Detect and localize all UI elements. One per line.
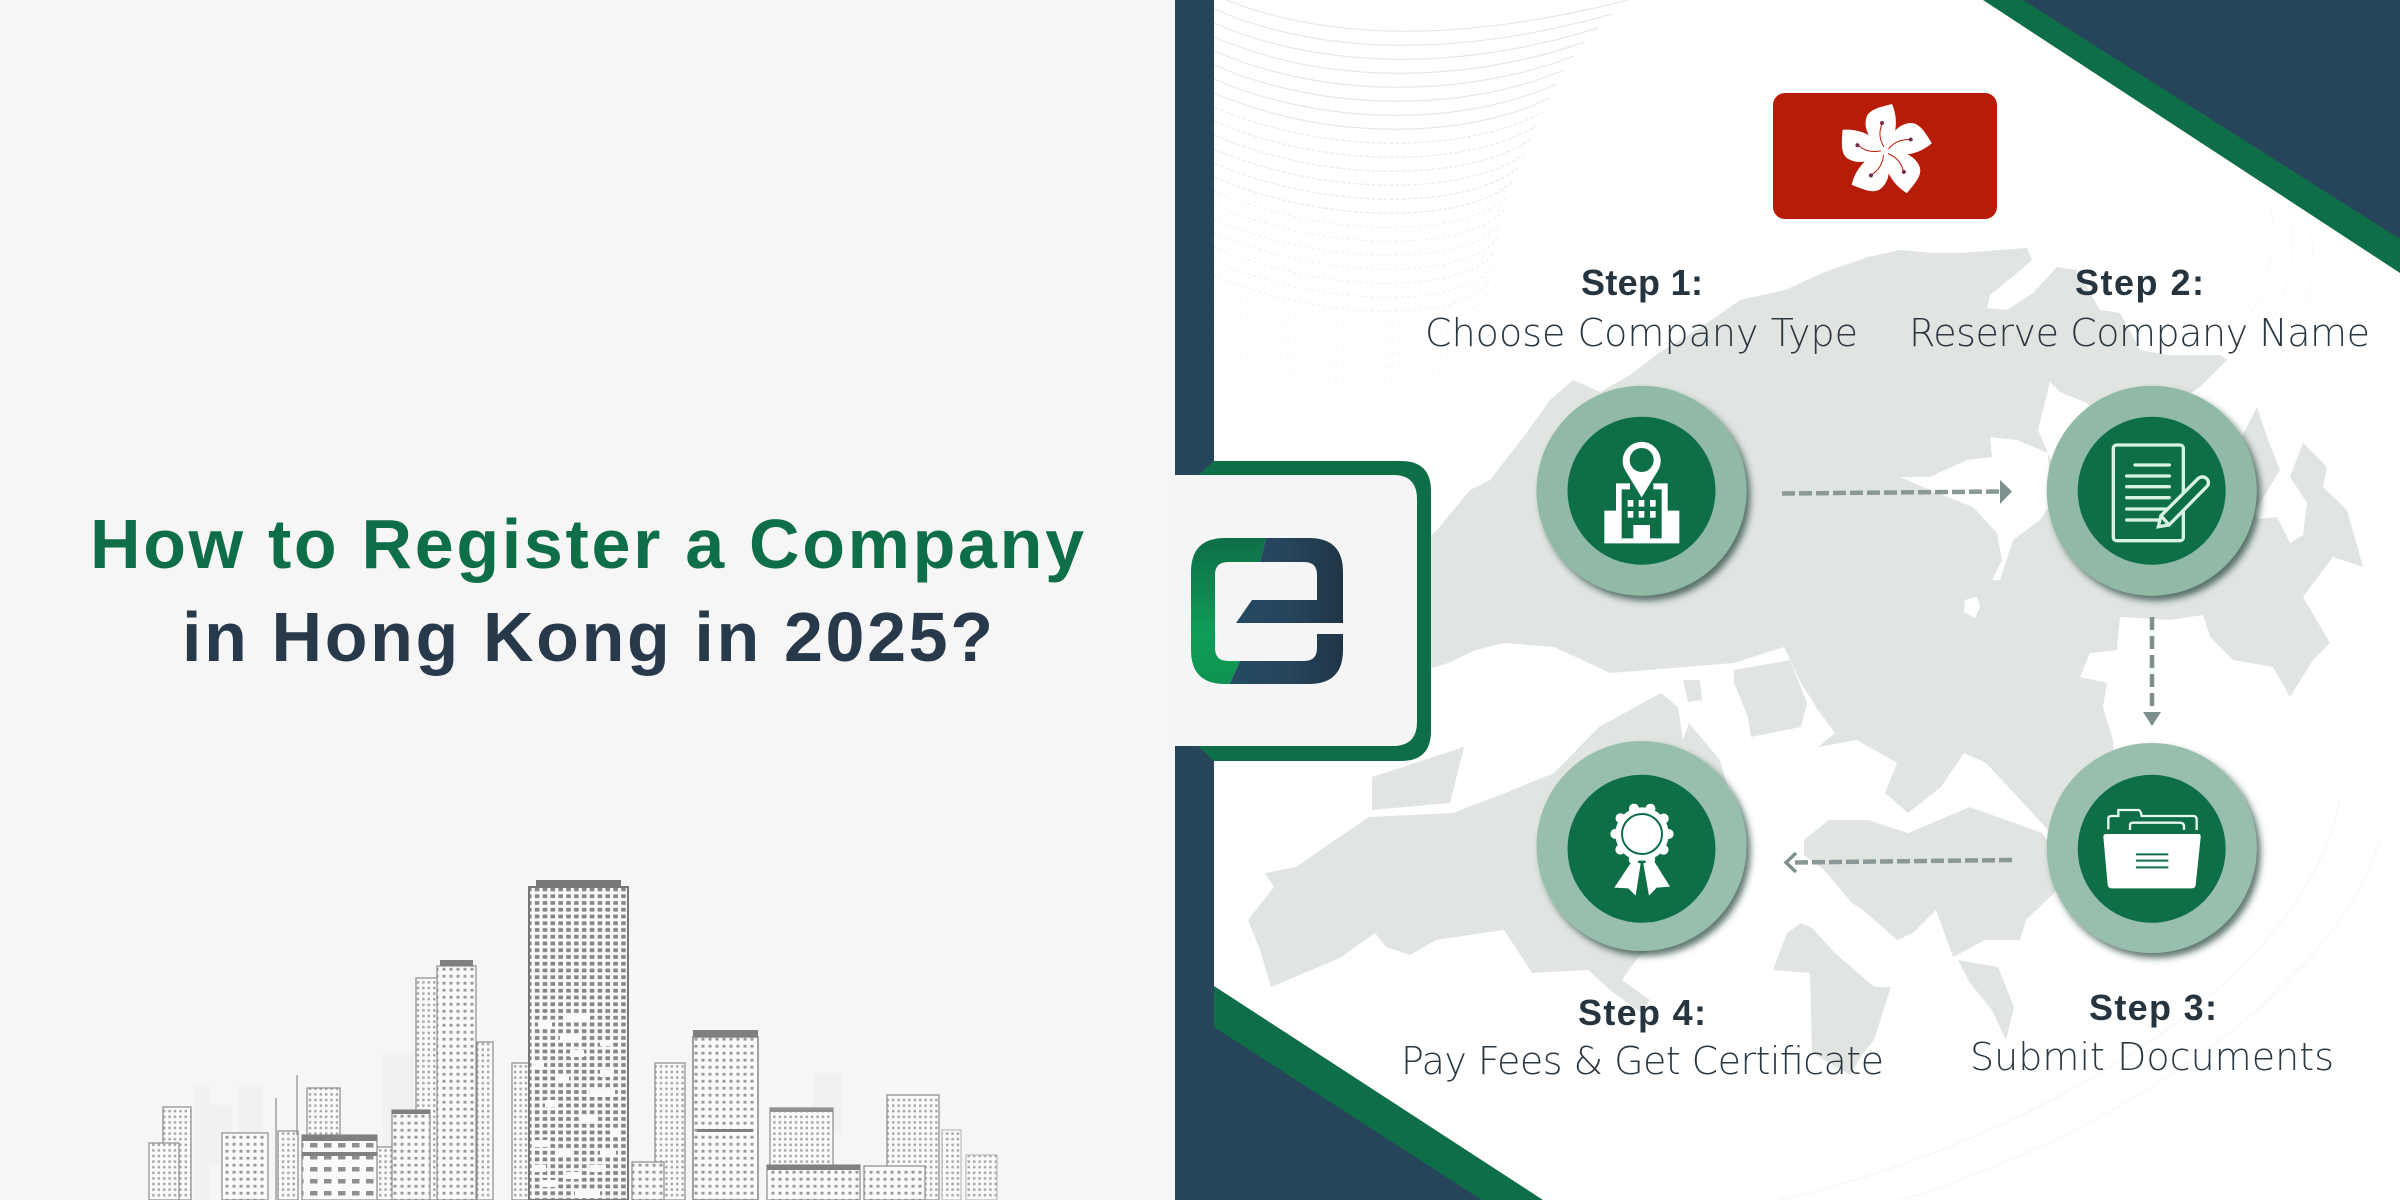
panel: left background (0, 0, 1175, 1200)
step 3 label: Submit Documents (1970, 1035, 2334, 1079)
arrow: step 2 to step 3 (2143, 617, 2161, 726)
skyline: main tower (529, 887, 628, 1200)
map: Chek Lap Kok airport island (1372, 747, 1464, 810)
map: small southern island (1958, 960, 2014, 1040)
step 4 label (1401, 992, 1884, 1083)
corner: bottom-left green and navy triangles (1214, 986, 1543, 1200)
step 1 label (1425, 262, 1858, 355)
panel: right background (1175, 0, 2400, 1200)
flag: bauhinia flower (1834, 104, 1933, 200)
map of Hong Kong silhouette (1248, 248, 2363, 1075)
map: small islet (1683, 680, 1702, 702)
step 2 label: Reserve Company Name (1909, 311, 2370, 355)
step 4 label: Pay Fees & Get Certificate (1401, 1039, 1884, 1083)
icon: document and pencil (2113, 445, 2208, 541)
logo mark: letter e (1191, 538, 1343, 684)
map: New Territories and Kowloon (1420, 248, 2290, 850)
step 1 label: Choose Company Type (1425, 311, 1858, 355)
title: How to Register a Company (90, 505, 1084, 583)
step 3 label (1970, 987, 2334, 1079)
flag of Hong Kong (1773, 93, 1997, 219)
arrow: step 3 to step 4 (1786, 853, 2012, 872)
step 2 circle (2047, 386, 2257, 596)
skyline illustration (149, 880, 997, 1200)
step 2 label (1909, 262, 2370, 355)
map: Sai Kung peninsula (2180, 407, 2363, 697)
skyline: tower missing windows (534, 1015, 620, 1198)
navy vertical strip (1175, 0, 1214, 1200)
map: Tsing Yi island (1734, 660, 1807, 737)
step 1 label: Step 1: (1581, 262, 1703, 303)
step 4 label: Step 4: (1578, 992, 1706, 1033)
map: white inlets (1900, 382, 2100, 618)
step 4 circle (1536, 741, 1746, 951)
map: Hong Kong Island (1804, 807, 2070, 957)
icon: file folder (2103, 810, 2201, 888)
title (90, 505, 1084, 676)
wave pattern: faint dots top-right and rings bottom-right (1780, 120, 2380, 1200)
logo card (1175, 461, 1431, 761)
skyline: faint background buildings (194, 1053, 842, 1200)
step 3 label: Step 3: (2089, 987, 2217, 1028)
step 2 label: Step 2: (2075, 262, 2204, 303)
arrow: step 1 to step 2 (1782, 480, 2012, 504)
corner: top-right green and navy triangles (1983, 0, 2400, 273)
icon: award rosette (1614, 807, 1670, 896)
map: Lamma Island (1773, 923, 1891, 1075)
step 3 circle (2047, 743, 2257, 953)
wave pattern: top-left fine lines (1214, 0, 1628, 381)
icon: building with location pin (1604, 442, 1679, 543)
map: Lantau Island (1248, 693, 1745, 1012)
step 1 circle (1536, 386, 1746, 596)
title: in Hong Kong in 2025? (182, 598, 993, 676)
